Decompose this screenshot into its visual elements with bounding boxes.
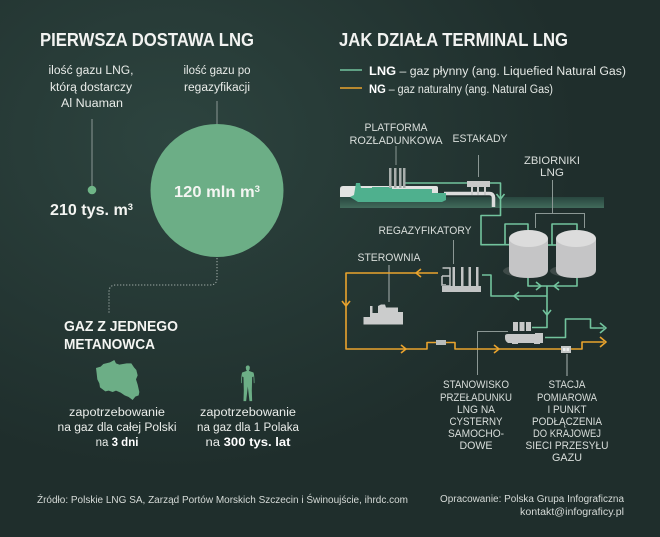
text: demand for Poland — [58, 407, 176, 449]
label: metering station — [526, 379, 609, 464]
title: pierwsza dostawa: PIERWSZA DOSTAWA LNG — [40, 30, 254, 50]
icon: map of Poland — [96, 360, 139, 400]
labels: diagram: PLATFORMA — [364, 122, 428, 134]
label: loading station — [440, 379, 512, 452]
value: 120 mln m3: 3 — [255, 184, 260, 194]
labels: diagram: STEROWNIA — [358, 252, 421, 264]
text: demand for one person: zapotrzebowanie — [200, 407, 296, 419]
tanker truck — [505, 333, 543, 344]
label: metering station: SIECI PRZESYŁU — [526, 440, 609, 452]
labels: diagram: ZBIORNIKI — [524, 155, 580, 167]
label: loading station: DOWE — [460, 440, 492, 452]
label: loading station: CYSTERNY — [450, 416, 503, 428]
label: metering station: STACJA — [548, 379, 586, 391]
dotted connector — [109, 258, 217, 314]
label: loading station: SAMOCHO- — [448, 428, 504, 440]
NG pipelines — [342, 269, 606, 353]
metering station box — [561, 346, 571, 353]
labels: diagram — [350, 122, 580, 264]
legend: LNG – gaz płynny (ang. Liquefied Natural Gas) — [369, 64, 626, 78]
footer: credits: Opracowanie: Polska Grupa Infograficzna — [440, 494, 624, 505]
heading: gaz z jednego metanowca — [64, 318, 178, 353]
text: LNG amount description — [48, 65, 134, 110]
label: metering station: I PUNKT — [548, 404, 587, 416]
text: demand for one person — [197, 407, 300, 449]
value: 120 mln m3: 120 mln m — [174, 184, 250, 201]
text: demand for Poland: na gaz dla całej Polski — [58, 422, 176, 434]
text: LNG amount description: ilość gazu LNG, — [48, 65, 134, 77]
water band — [340, 197, 604, 208]
trestle — [467, 181, 490, 195]
labels: diagram: LNG — [540, 167, 564, 179]
value: 210 tys. m3: 3 — [128, 202, 133, 212]
icon: person — [241, 365, 254, 401]
text: LNG amount description: Al Nuaman — [61, 98, 123, 110]
regasifiers — [442, 267, 481, 292]
text: demand for Poland: na 3 dni — [96, 437, 138, 449]
value: 210 tys. m3: 210 tys. m — [50, 202, 125, 219]
NG meter box — [436, 340, 446, 345]
footer: credits — [440, 494, 624, 518]
heading: gaz z jednego metanowca: METANOWCA — [64, 336, 155, 353]
label: loading station: PRZEŁADUNKU — [440, 392, 512, 404]
heading: gaz z jednego metanowca: GAZ Z JEDNEGO — [64, 318, 178, 335]
leader line to big circle — [216, 101, 218, 124]
label: metering station: PODŁĄCZENIA — [532, 416, 603, 428]
leader line and small LNG dot — [88, 119, 96, 194]
text: demand for one person: na gaz dla 1 Polaka — [197, 422, 300, 434]
ship — [350, 183, 446, 202]
text: regasified amount description: ilość gazu po — [184, 65, 250, 77]
footer: credits: kontakt@infograficy.pl — [520, 507, 624, 518]
loading station tanks — [513, 322, 531, 331]
text: regasified amount description — [184, 65, 250, 94]
text: regasified amount description: regazyfikacji — [184, 82, 250, 94]
text: demand for Poland: zapotrzebowanie — [69, 407, 165, 419]
text: demand for one person: na 300 tys. lat — [206, 437, 291, 449]
text: LNG amount description: którą dostarczy — [50, 82, 132, 94]
big circle: regasified gas — [150, 124, 284, 257]
label: metering station: DO KRAJOWEJ — [533, 428, 601, 440]
label: metering station: GAZU — [552, 452, 582, 464]
legend — [340, 64, 626, 96]
LNG pipelines — [404, 183, 606, 338]
legend: NG – gaz naturalny (ang. Natural Gas) — [369, 82, 553, 96]
unloading arms — [389, 168, 406, 188]
label: metering station: POMIAROWA — [537, 392, 598, 404]
label: loading station: STANOWISKO — [443, 379, 509, 391]
labels: diagram: ROZŁADUNKOWA — [350, 135, 443, 147]
title: jak działa terminal: JAK DZIAŁA TERMINAL LNG — [339, 30, 568, 50]
LNG tanks — [503, 230, 596, 278]
label: loading station: LNG NA — [457, 404, 496, 416]
labels: diagram: REGAZYFIKATORY — [378, 225, 472, 237]
diagram leader lines — [389, 146, 584, 376]
white pipe and ship hull — [340, 186, 494, 207]
labels: diagram: ESTAKADY — [452, 133, 508, 145]
control building — [364, 304, 403, 324]
footer: source: Źródło: Polskie LNG SA, Zarząd Portów Morskich Szczecin i Świnoujście, ihrdc.com — [37, 493, 408, 506]
